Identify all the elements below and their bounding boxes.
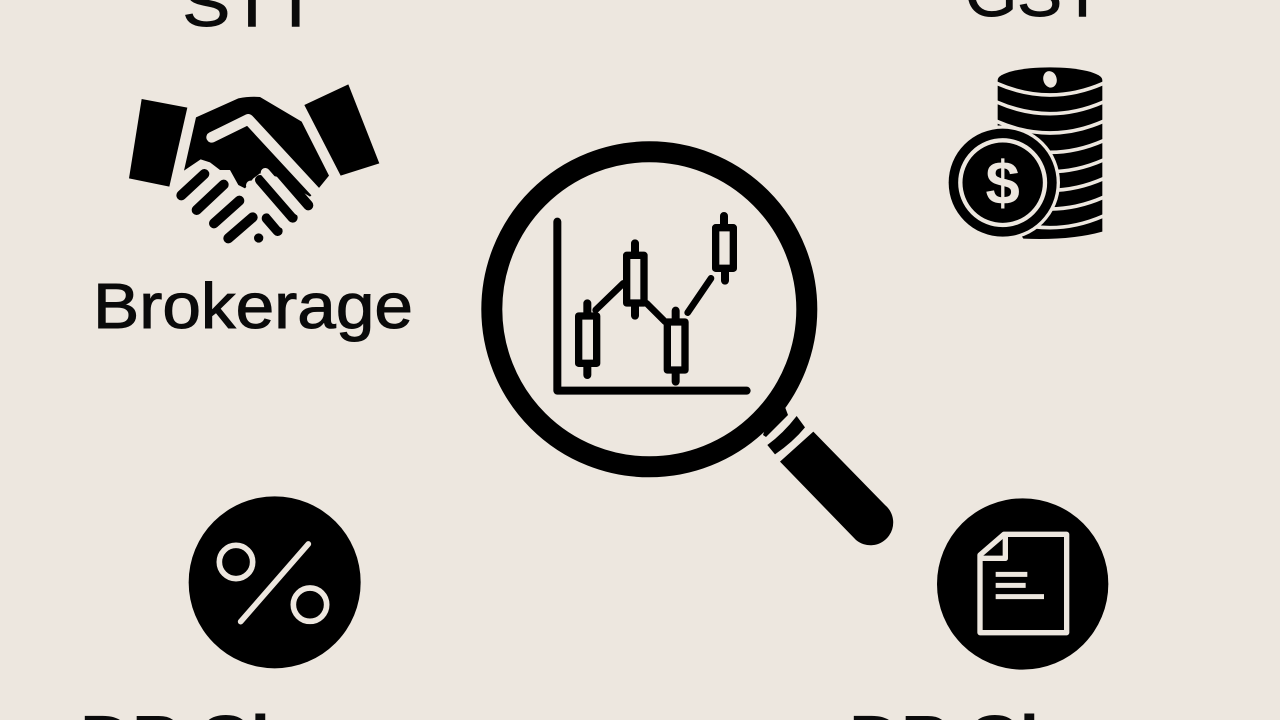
magnifier collar bbox=[763, 407, 788, 437]
label: Brokerage: Brokerage bbox=[93, 270, 413, 342]
magnifier ring bbox=[492, 152, 807, 467]
icon: coin stack: $ bbox=[986, 149, 1020, 218]
icon: coin stack bbox=[945, 67, 1103, 240]
icon: percent badge bbox=[189, 496, 361, 668]
magnifier handle bbox=[767, 416, 893, 545]
icon: handshake bbox=[129, 84, 379, 243]
candlestick chart bbox=[557, 216, 747, 391]
icon: document badge bbox=[937, 498, 1108, 670]
icon: magnifying glass bbox=[492, 152, 893, 545]
